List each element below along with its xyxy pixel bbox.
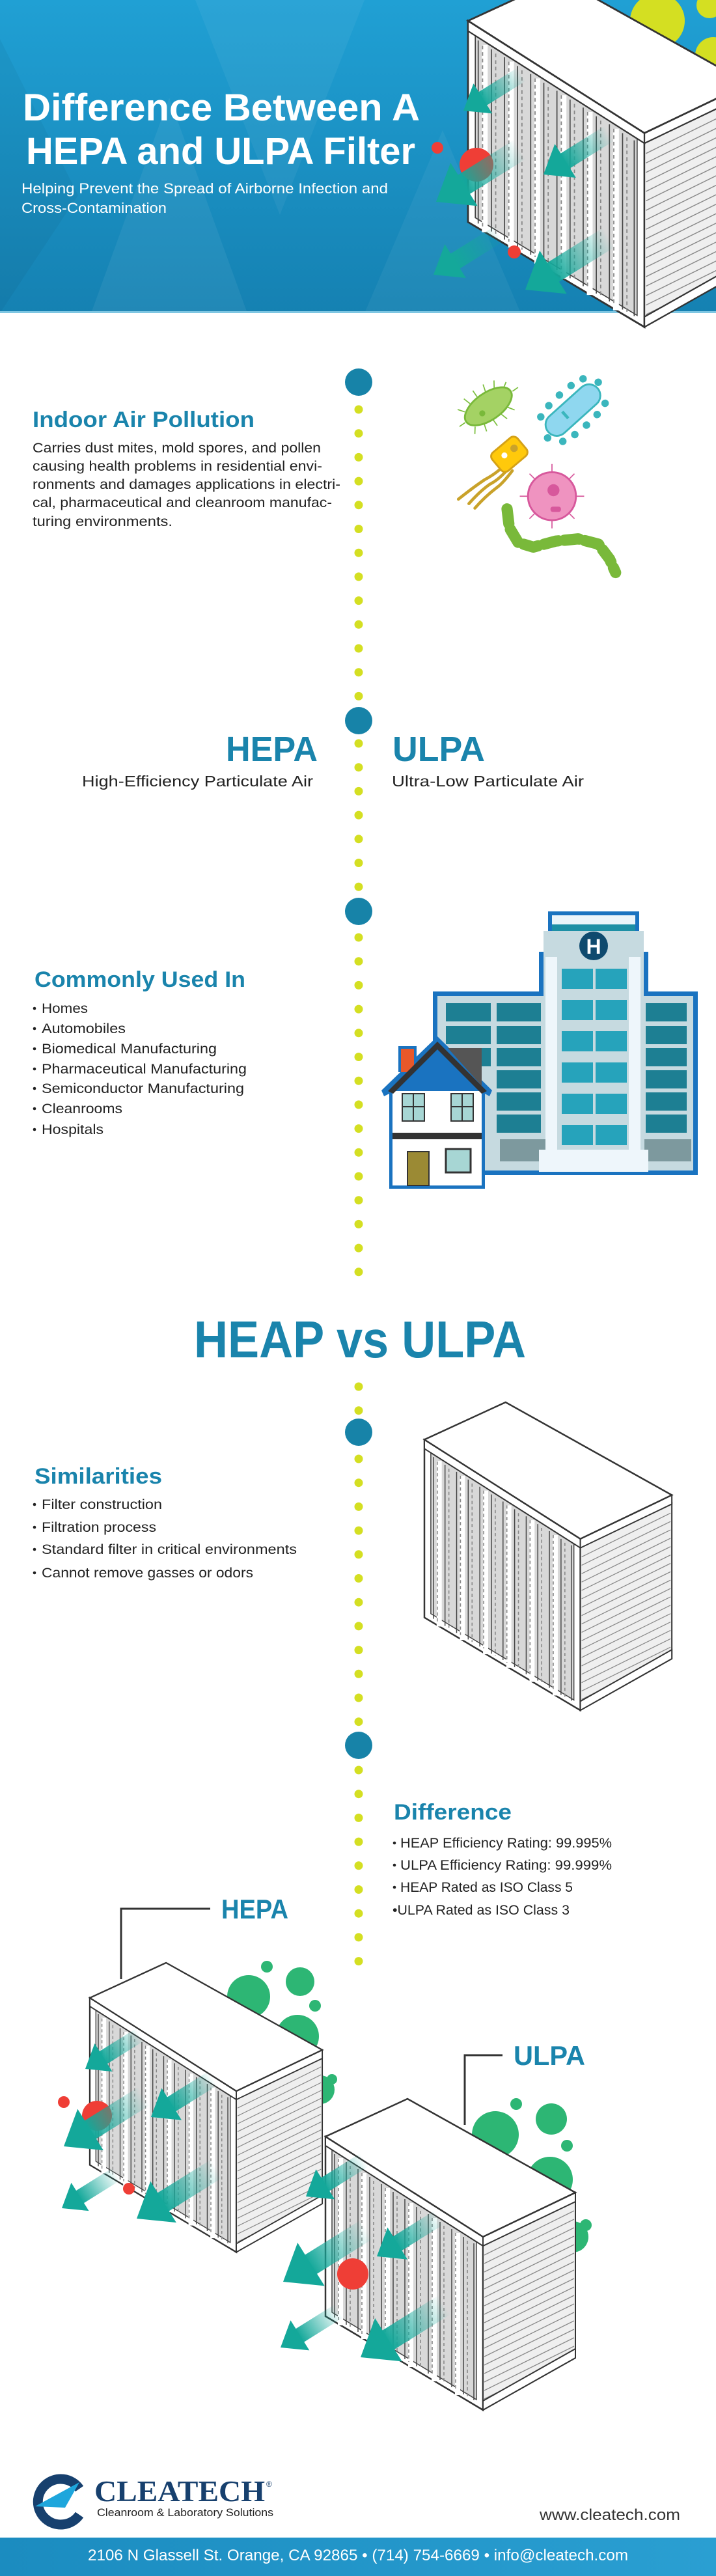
HEPA / ULPA definitions: Ultra-Low Particulate Air (392, 773, 584, 790)
title: Difference Between A (23, 87, 420, 129)
section: commonly used in: Homes (42, 1001, 88, 1016)
section: indoor air pollution: Indoor Air Pollution (33, 408, 255, 432)
section: indoor air pollution (33, 408, 340, 529)
section: similarities: Similarities (34, 1464, 162, 1489)
section: similarities: Standard filter in critical environments (42, 1542, 297, 1557)
illustration: ULPA filter (269, 2098, 592, 2410)
section: indoor air pollution: cal, pharmaceutical and cleanroom manufac- (33, 495, 332, 510)
title (23, 87, 420, 173)
HEPA / ULPA definitions: ULPA (392, 730, 485, 769)
section: commonly used in: Cleanrooms (42, 1101, 122, 1116)
footer bar: 2106 N Glassell St. Orange, CA 92865 • (714) 754-6669 • info@cleatech.com (88, 2547, 628, 2564)
icon: bacteria (447, 366, 618, 573)
logo: Cleatech: CLEATECH (94, 2474, 265, 2508)
section: difference: •ULPA Rated as ISO Class 3 (392, 1903, 570, 1918)
label: HEPA (121, 1894, 288, 1979)
icon: hospital and house: H (586, 935, 601, 958)
footer bar (0, 2538, 716, 2576)
label: ULPA: ULPA (514, 2040, 585, 2071)
logo: Cleatech (35, 2474, 273, 2525)
title: HEPA and ULPA Filter (26, 130, 415, 173)
section: indoor air pollution: ronments and damages applications in electri- (33, 477, 340, 492)
HEPA / ULPA definitions (82, 730, 584, 790)
section: commonly used in: Semiconductor Manufacturing (42, 1081, 244, 1096)
section: commonly used in (33, 967, 247, 1137)
section: similarities: Filter construction (42, 1497, 162, 1512)
section: difference (392, 1800, 612, 1918)
section: similarities: Filtration process (42, 1520, 156, 1535)
section: commonly used in: Pharmaceutical Manufacturing (42, 1062, 247, 1077)
header illustration: filter with particles (422, 0, 716, 327)
label: ULPA (465, 2040, 585, 2125)
label: HEPA: HEPA (221, 1894, 288, 1924)
website: www.cleatech.com (539, 2506, 680, 2524)
section: similarities: Cannot remove gasses or odors (42, 1566, 253, 1581)
section: difference: HEAP Efficiency Rating: 99.995% (400, 1836, 612, 1851)
heading: HEAP vs ULPA: HEAP vs ULPA (194, 1310, 526, 1368)
section: commonly used in: Hospitals (42, 1122, 103, 1137)
section: difference: ULPA Efficiency Rating: 99.999% (400, 1858, 612, 1873)
subtitle: Cross-Contamination (21, 200, 167, 216)
section: indoor air pollution: Carries dust mites, mold spores, and pollen (33, 441, 321, 456)
section: commonly used in: Biomedical Manufacturing (42, 1042, 217, 1057)
section: indoor air pollution: turing environments. (33, 514, 172, 529)
subtitle (21, 180, 388, 216)
section: indoor air pollution: causing health problems in residential envi- (33, 459, 322, 474)
icon: filter (424, 1402, 672, 1710)
logo: Cleatech: Cleanroom & Laboratory Solutions (97, 2506, 273, 2519)
header banner (0, 0, 716, 313)
section: commonly used in: Commonly Used In (34, 967, 245, 992)
icon: hospital and house (381, 911, 698, 1189)
section: similarities (33, 1464, 297, 1581)
HEPA / ULPA definitions: High-Efficiency Particulate Air (82, 773, 313, 790)
section: commonly used in: Automobiles (42, 1021, 126, 1036)
timeline (345, 368, 372, 1962)
section: difference: HEAP Rated as ISO Class 5 (400, 1880, 573, 1895)
HEPA / ULPA definitions: HEPA (226, 730, 318, 769)
section: difference: Difference (394, 1800, 512, 1825)
logo: Cleatech: ® (266, 2480, 272, 2489)
subtitle: Helping Prevent the Spread of Airborne Infection and (21, 180, 388, 197)
illustration: HEPA filter (51, 1961, 337, 2252)
